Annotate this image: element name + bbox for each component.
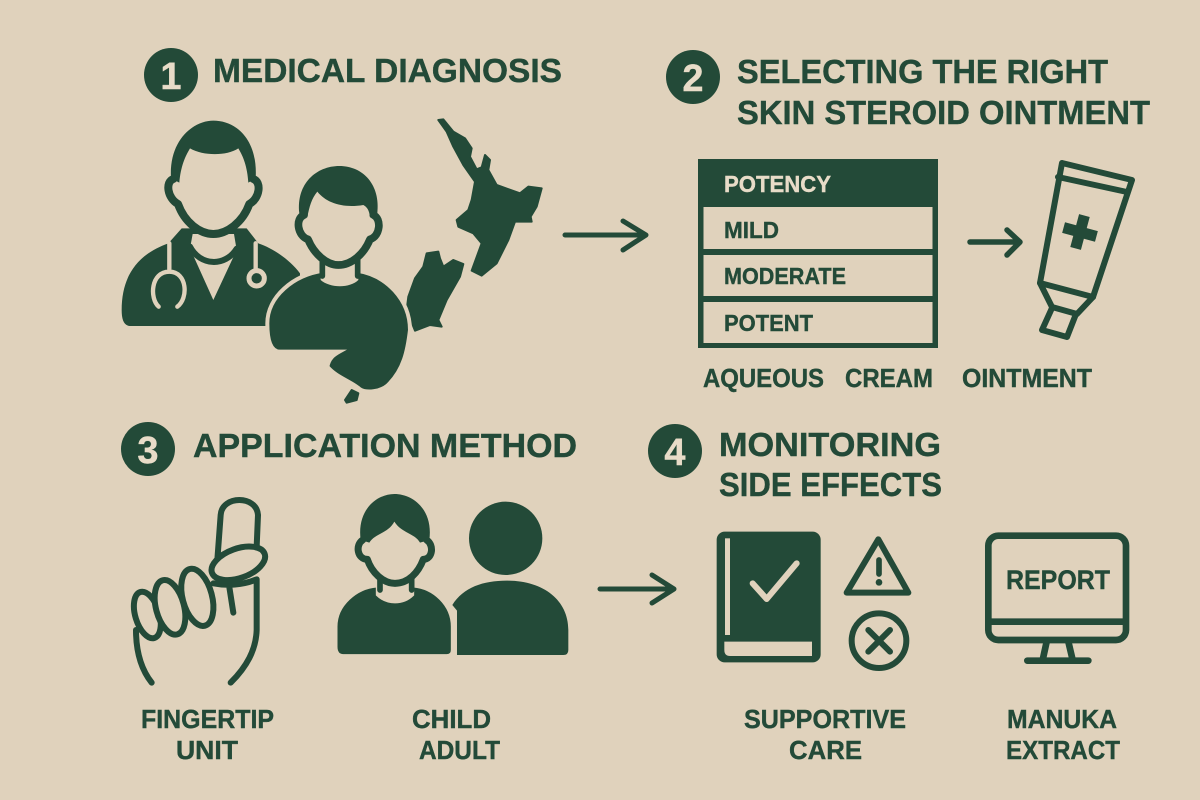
arrow: diagnosis to selecting ointment — [565, 221, 646, 250]
heading: selecting the right skin steroid ointment: SELECTING THE RIGHT — [737, 54, 1109, 91]
arrow: potency to tube — [970, 230, 1020, 255]
number badge 4: 4 — [664, 432, 686, 474]
icon: book with check mark — [717, 532, 821, 662]
heading: monitoring side effects — [719, 427, 942, 504]
icon: fingertip unit hand — [129, 500, 270, 683]
labels: vehicle types: OINTMENT — [962, 363, 1092, 393]
icon: doctor with stethoscope — [122, 121, 300, 326]
labels: fingertip unit: FINGERTIP — [141, 704, 274, 734]
labels: child and adult: CHILD — [412, 704, 491, 734]
table: potency levels — [698, 159, 938, 348]
number badge 1 — [144, 48, 198, 102]
panel: monitoring side effects — [648, 424, 1126, 765]
heading: medical diagnosis: MEDICAL DIAGNOSIS — [213, 53, 562, 90]
labels: supportive care — [744, 704, 906, 765]
icon: map of New Zealand — [345, 119, 542, 403]
labels: fingertip unit: UNIT — [176, 735, 238, 765]
labels: fingertip unit — [141, 704, 274, 765]
labels: supportive care: CARE — [789, 735, 862, 765]
labels: manuka extract: MANUKA — [1007, 704, 1117, 734]
number badge 4 — [648, 424, 702, 478]
labels: child and adult — [412, 704, 500, 765]
icon: monitor with report — [988, 536, 1126, 661]
icon: patient — [267, 166, 410, 392]
number badge 1: 1 — [160, 56, 182, 98]
number badge 2: 2 — [682, 58, 704, 100]
table: potency levels: POTENCY — [724, 171, 831, 197]
table: potency levels: MODERATE — [724, 263, 846, 289]
panel: medical diagnosis — [122, 48, 562, 403]
icon: warning triangle — [847, 539, 908, 593]
table: potency levels: POTENT — [724, 310, 814, 336]
labels: supportive care: SUPPORTIVE — [744, 704, 906, 734]
icon: ointment tube with cross — [1040, 163, 1132, 337]
panel: application method — [121, 422, 577, 765]
labels: vehicle types — [703, 363, 1092, 393]
icon: child and adult figures — [337, 494, 568, 655]
heading: selecting the right skin steroid ointment — [737, 54, 1151, 132]
panel: selecting the right skin steroid ointment — [666, 50, 1151, 393]
labels: manuka extract: EXTRACT — [1006, 735, 1120, 765]
labels: manuka extract — [1006, 704, 1120, 765]
number badge 2 — [666, 50, 720, 104]
heading: monitoring side effects: SIDE EFFECTS — [719, 467, 942, 504]
table: potency levels: MILD — [724, 217, 779, 243]
labels: child and adult: ADULT — [419, 735, 500, 765]
labels: vehicle types: CREAM — [845, 363, 933, 393]
number badge 3 — [121, 422, 175, 476]
icon: monitor with report: REPORT — [1006, 565, 1110, 595]
number badge 3: 3 — [137, 430, 159, 472]
heading: selecting the right skin steroid ointment: SKIN STEROID OINTMENT — [737, 95, 1151, 132]
heading: monitoring side effects: MONITORING — [719, 427, 941, 464]
arrow: application to monitoring — [600, 575, 674, 603]
heading: application method: APPLICATION METHOD — [193, 428, 577, 465]
icon: cross in circle — [852, 613, 906, 668]
labels: vehicle types: AQUEOUS — [703, 363, 824, 393]
